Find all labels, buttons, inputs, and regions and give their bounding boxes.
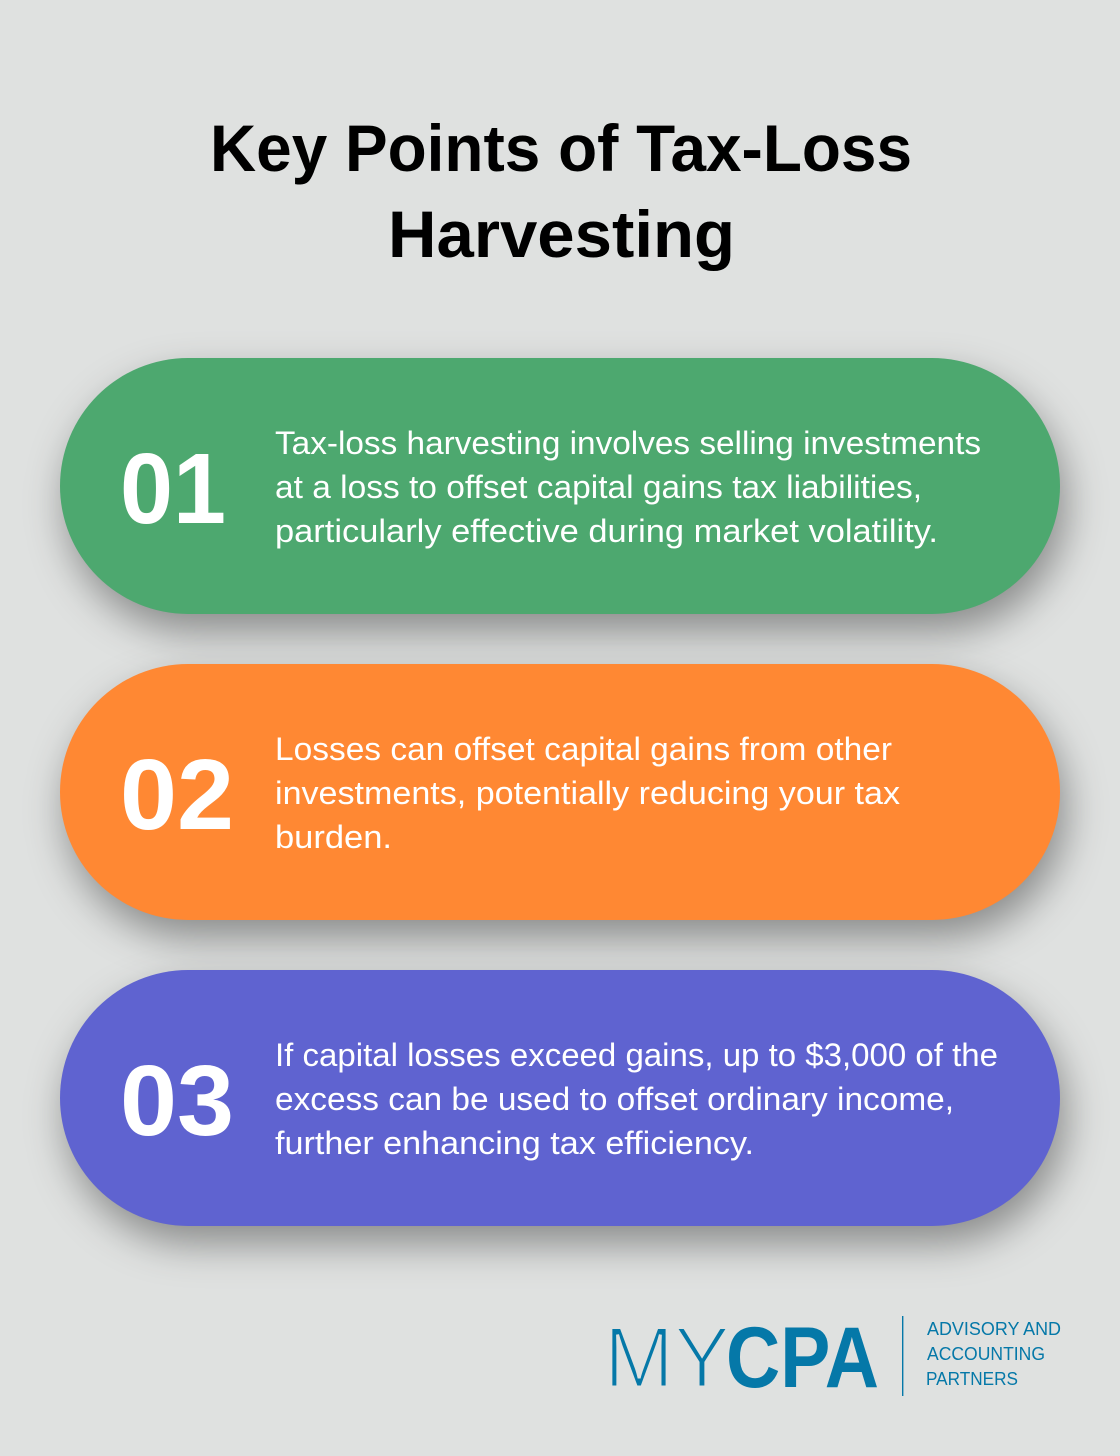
title: Key Points of Tax-Loss bbox=[210, 111, 912, 185]
text block: point 02: investments, potentially reducing your tax bbox=[275, 775, 900, 811]
text block: point 03 bbox=[275, 1037, 998, 1161]
number 03: 03 bbox=[120, 1045, 234, 1157]
text block: point 03: further enhancing tax efficiency. bbox=[275, 1125, 754, 1161]
text block: point 03: If capital losses exceed gains, up to $3,000 of the bbox=[275, 1037, 998, 1073]
logo wordmark bbox=[604, 1310, 879, 1406]
logo tagline: ACCOUNTING bbox=[927, 1344, 1045, 1364]
number 02: 02 bbox=[120, 739, 234, 851]
text block: point 01: at a loss to offset capital gains tax liabilities, bbox=[275, 469, 922, 505]
panel: point 03 bbox=[60, 970, 1066, 1244]
text block: point 01: Tax-loss harvesting involves selling investments bbox=[275, 425, 981, 461]
text block: point 02: burden. bbox=[275, 819, 392, 855]
text block: point 02: Losses can offset capital gains from other bbox=[275, 731, 892, 767]
logo tagline: ADVISORY AND bbox=[927, 1319, 1061, 1339]
logo wordmark: MY bbox=[604, 1310, 730, 1406]
number 01: 01 bbox=[120, 433, 226, 545]
logo: MYCPA bbox=[604, 1310, 1061, 1406]
title bbox=[210, 111, 912, 271]
text block: point 02 bbox=[275, 731, 900, 855]
title: Harvesting bbox=[388, 197, 735, 271]
text block: point 01 bbox=[275, 425, 981, 549]
logo tagline: PARTNERS bbox=[926, 1369, 1018, 1389]
text block: point 03: excess can be used to offset ordinary income, bbox=[275, 1081, 954, 1117]
panel: point 02 bbox=[60, 664, 1066, 938]
text block: point 01: particularly effective during market volatility. bbox=[275, 513, 938, 549]
logo wordmark: CPA bbox=[726, 1310, 879, 1406]
logo tagline bbox=[926, 1319, 1061, 1389]
panel: point 01 bbox=[60, 358, 1066, 632]
